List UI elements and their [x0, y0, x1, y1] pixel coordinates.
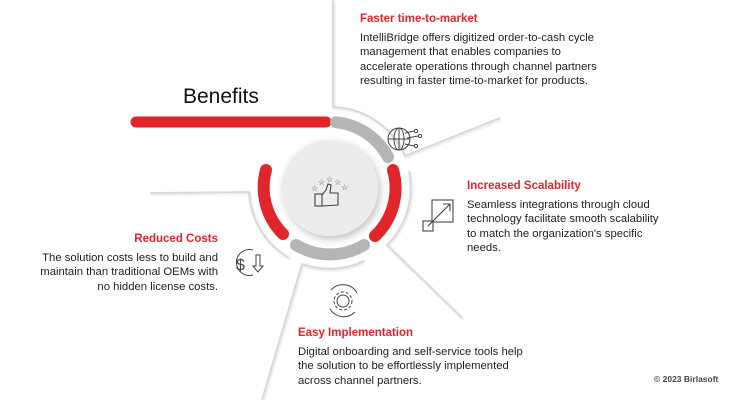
text: faster time-to-market: accelerate operations through channel partners — [360, 60, 597, 72]
text: faster time-to-market: management that enables companies to — [360, 46, 561, 58]
text: easy implementation: the solution to be effortlessly implemented — [298, 360, 509, 372]
text: reduced costs — [40, 233, 218, 292]
text: reduced costs: The solution costs less to build and — [42, 252, 218, 264]
text: easy implementation: Digital onboarding and self-service tools help — [298, 346, 523, 358]
text: faster time-to-market — [360, 13, 597, 87]
text: increased scalability: Increased Scalability — [467, 180, 581, 192]
ring segments — [264, 122, 396, 254]
text: increased scalability: technology facilitate smooth scalability — [467, 213, 659, 225]
copyright: © 2023 Birlasoft — [654, 374, 718, 384]
text: increased scalability: to match the organization's specific — [467, 228, 642, 240]
text: easy implementation: Easy Implementation — [298, 327, 413, 339]
icon: scale arrow — [423, 200, 453, 231]
text: reduced costs: maintain than traditional OEMs with — [40, 266, 218, 278]
text: increased scalability: Seamless integrations through cloud — [467, 198, 650, 210]
text: increased scalability — [467, 180, 659, 254]
icon: thumbs up with stars — [311, 175, 348, 206]
text: increased scalability: needs. — [467, 242, 501, 254]
center disc — [282, 140, 378, 236]
icon: thumbs up with stars: ☆ — [334, 178, 341, 187]
red bar — [136, 116, 326, 128]
icon: thumbs up with stars: ☆ — [326, 175, 333, 184]
text: faster time-to-market: IntelliBridge offers digitized order-to-cash cycle — [360, 32, 594, 44]
text: reduced costs: Reduced Costs — [134, 233, 218, 245]
text: easy implementation — [298, 327, 523, 386]
text: easy implementation: across channel partners. — [298, 374, 422, 386]
divider lines — [150, 0, 500, 400]
icon: dollar down: $ — [236, 257, 245, 274]
title: Benefits — [183, 85, 259, 108]
text: reduced costs: no hidden license costs. — [97, 280, 218, 292]
icon: thumbs up with stars: ☆ — [341, 183, 348, 192]
text: faster time-to-market: resulting in faster time-to-market for products. — [360, 75, 588, 87]
icon: dollar down — [236, 249, 263, 276]
icon: globe network — [388, 128, 422, 150]
icon: gear cycle — [330, 285, 357, 317]
text: faster time-to-market: Faster time-to-market — [360, 13, 478, 25]
icon: thumbs up with stars: ☆ — [311, 184, 318, 193]
icon: thumbs up with stars: ☆ — [318, 178, 325, 187]
